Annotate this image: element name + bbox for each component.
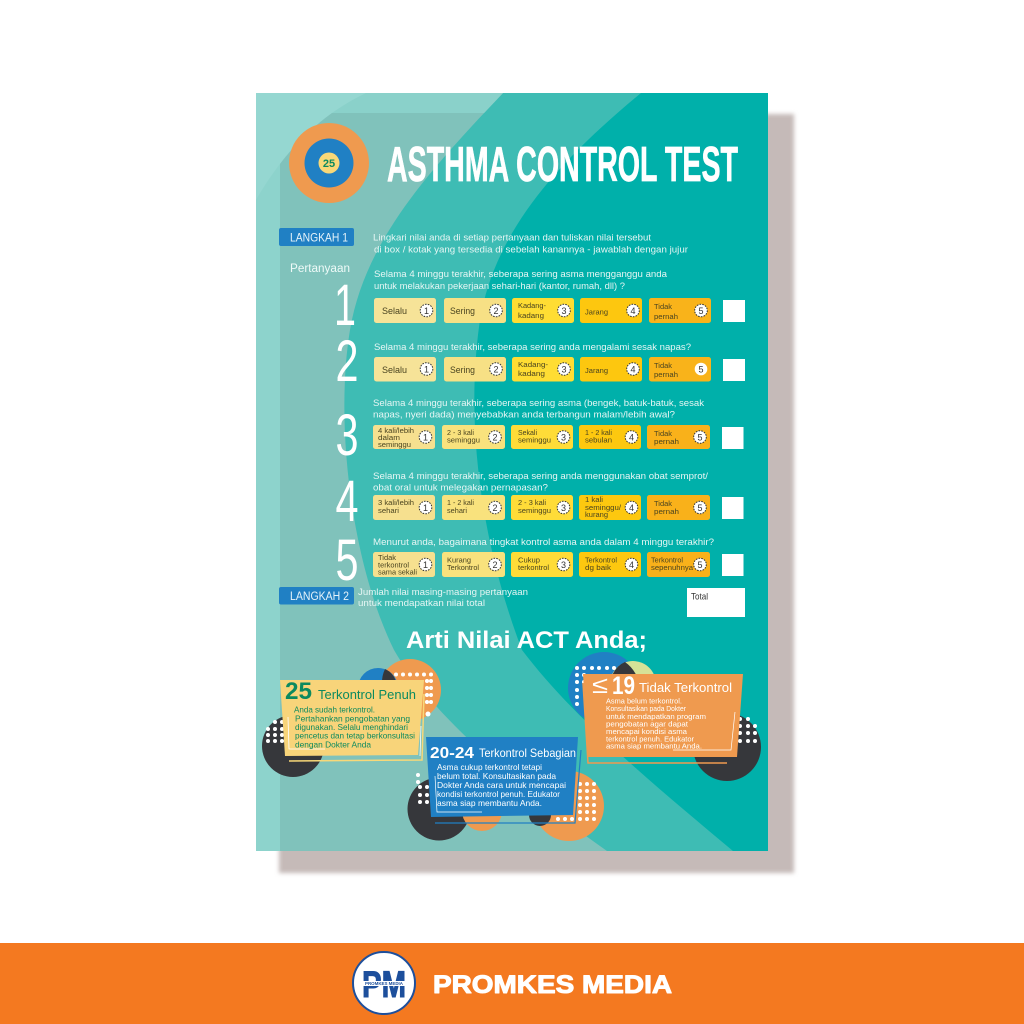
question 5 options: Kurang [447, 558, 471, 564]
card 19: terkontrol penuh. Edukator [606, 734, 694, 744]
question 5 options: Tidak [378, 555, 397, 562]
question 4 options [373, 495, 710, 520]
card 19: Asma belum terkontrol. [606, 696, 682, 706]
question 2 options: 2 [493, 364, 499, 374]
question 1 text [374, 269, 668, 291]
step 1 label: LANGKAH 1 [290, 232, 348, 244]
question 4 options: sehari [378, 508, 399, 515]
question 4 number: 4 [336, 469, 358, 534]
question 3 options: Tidak [654, 431, 673, 438]
card 19: Konsultasikan pada Dokter [606, 704, 686, 713]
question 3 options: seminggu [378, 442, 411, 449]
question 3 options: seminggu [447, 438, 480, 444]
question 5 options: sepenuhnya [651, 565, 693, 572]
question 5 options: Terkontrol [585, 558, 617, 564]
answer box 1 [723, 300, 745, 322]
card 19: mencapai kondisi asma [606, 727, 688, 736]
question 2 options: 5 [698, 364, 704, 374]
question 4 options: 2 - 3 kali [518, 500, 546, 507]
question 2 options: kadang [518, 371, 545, 378]
step 2 instructions [358, 587, 528, 608]
question 5 options: 4 [629, 560, 634, 570]
answer box 4 [722, 497, 744, 519]
question 3 options: 1 [423, 432, 428, 442]
decorative circles 25 [262, 659, 441, 777]
question 1 options: 5 [698, 306, 704, 316]
question 1 options [374, 298, 711, 323]
answer box 3 [722, 427, 744, 449]
card 25: Pertahankan pengobatan yang [295, 714, 410, 724]
question 4 options: 5 [697, 503, 703, 513]
decorative circles 20-24 [408, 771, 604, 841]
question 1 options: Jarang [585, 310, 608, 316]
question 3 options: 5 [697, 432, 703, 442]
question 5 text: Menurut anda, bagaimana tingkat kontrol asma anda dalam 4 minggu terakhir? [373, 537, 714, 547]
question 1 options: Selalu [382, 306, 407, 317]
panel: score 19 or below [568, 652, 761, 781]
question 1 options: 1 [424, 306, 429, 316]
question 1 options: pernah [654, 314, 678, 321]
card 19: 19 [612, 672, 635, 700]
step 1 instructions: di box / kotak yang tersedia di sebelah kanannya - jawablah dengan jujur [374, 244, 688, 254]
question 4 options: 2 [492, 503, 498, 513]
step 1 label [279, 228, 354, 246]
question 3 text: napas, nyeri dada) menyebabkan anda terbangun malam/lebih awal? [373, 410, 675, 420]
card 25 [280, 678, 424, 761]
question 2 options: Kadang- [518, 362, 549, 369]
question 5 options [373, 552, 710, 577]
question 2 options: 1 [424, 364, 429, 374]
card 25: pencetus dan tetap berkonsultasi [295, 730, 415, 740]
question 1 options: kadang [518, 313, 544, 320]
question 4 options: 1 kali [585, 497, 603, 504]
panel: score 25 [262, 659, 441, 777]
question 4 options: sehari [447, 508, 467, 515]
title: ASTHMA CONTROL TEST [387, 138, 738, 192]
question 1 number: 1 [334, 273, 356, 338]
question 5 options: terkontrol [378, 562, 409, 570]
question 2 options [374, 357, 711, 382]
card 20-24: Terkontrol Sebagian [479, 746, 576, 760]
question 4 options: Tidak [654, 501, 673, 508]
logo: PM: PM [362, 964, 406, 1005]
logo: PM: PROMKES MEDIA [365, 981, 404, 986]
question 5 number: 5 [336, 528, 358, 593]
question 3 options: 2 - 3 kali [447, 430, 474, 437]
card 25: Anda sudah terkontrol. [294, 704, 375, 714]
card 19 [583, 672, 743, 763]
question 2 number: 2 [336, 329, 358, 394]
card 25: dengan Dokter Anda [295, 740, 371, 750]
card 25: digunakan. Selalu menghindari [295, 722, 408, 732]
card 20-24: 20-24 [430, 745, 474, 762]
question 5 options: 1 [423, 560, 428, 570]
question 3 options: 4 kali/lebih [378, 428, 414, 435]
card 25: Terkontrol Penuh [318, 687, 416, 702]
question 1 options: Sering [450, 306, 475, 317]
decorative circles 19 [568, 652, 761, 781]
badge: 25 target: 25 [323, 158, 335, 170]
question 3 options: dalam [378, 435, 400, 442]
question 1 options: Tidak [654, 304, 673, 311]
question 2 options: Jarang [585, 368, 608, 375]
question 3 options [373, 425, 710, 449]
card 20-24: asma siap membantu Anda. [437, 798, 542, 808]
question 3 options: seminggu [518, 438, 551, 444]
total box [687, 588, 745, 617]
card 19: asma siap membantu Anda. [606, 742, 702, 750]
question 4 text: Selama 4 minggu terakhir, seberapa sering anda menggunakan obat semprot/ [373, 471, 708, 481]
brand name: PROMKES MEDIA [433, 971, 672, 999]
question 2 options: 3 [561, 364, 567, 374]
poster shadow [279, 114, 794, 873]
question 5 options: sama sekali [378, 570, 417, 576]
question 4 options: 4 [629, 503, 634, 513]
question 4 options: 3 [561, 503, 566, 513]
question 2 text: Selama 4 minggu terakhir, seberapa sering anda mengalami sesak napas? [374, 342, 691, 352]
step 1 instructions: Lingkari nilai anda di setiap pertanyaan dan tuliskan nilai tersebut [373, 232, 651, 242]
badge: 25 target [289, 123, 369, 203]
question 3 text [373, 398, 704, 420]
question 4 text [373, 471, 708, 492]
question 1 options: 3 [561, 306, 567, 316]
question 4 options: seminggu/ [585, 505, 621, 512]
question 3 options: 4 [629, 432, 634, 442]
question 2 options: pernah [654, 372, 678, 379]
question 5 options: dg baik [585, 565, 612, 572]
question 2 options: Selalu [382, 365, 407, 376]
question 2 options: Tidak [654, 363, 673, 370]
step 2 instructions: untuk mendapatkan nilai total [358, 598, 485, 608]
card 20-24 [426, 737, 581, 823]
question 5 options: 3 [561, 560, 566, 570]
card 19: pengobatan agar dapat [606, 720, 689, 728]
question 3 options: 1 - 2 kali [585, 430, 612, 437]
card 20-24: Dokter Anda cara untuk mencapai [437, 780, 566, 790]
logo: PM [353, 952, 415, 1014]
question 5 options: 2 [492, 560, 498, 570]
question 3 options: sebulan [585, 438, 612, 444]
panel: score 20-24 [408, 737, 604, 841]
step 2 label: LANGKAH 2 [290, 591, 349, 603]
question 4 options: 1 [423, 503, 428, 513]
step 2 label [279, 587, 354, 604]
question 4 options: 3 kali/lebih [378, 500, 414, 507]
question 3 number: 3 [336, 403, 358, 468]
question 1 text: Selama 4 minggu terakhir, seberapa sering asma mengganggu anda [374, 269, 668, 279]
question 1 options: 4 [630, 306, 636, 316]
question 4 text: obat oral untuk melegakan pernapasan? [373, 482, 548, 492]
poster background [256, 93, 768, 851]
total box: Total [691, 592, 708, 602]
footer bar [0, 943, 1024, 1024]
question 3 options: Sekali [518, 430, 537, 437]
question 5 options: 5 [697, 560, 703, 570]
card 19: untuk mendapatkan program [606, 712, 706, 721]
question 2 options: Sering [450, 365, 475, 376]
step 1 instructions [373, 232, 688, 254]
question 1 options: 2 [493, 306, 499, 316]
heading: score meaning: Arti Nilai ACT Anda; [406, 627, 647, 654]
question 1 text: untuk melakukan pekerjaan sehari-hari (kantor, rumah, dll) ? [374, 281, 625, 291]
answer box 2 [723, 359, 745, 381]
question 3 options: 3 [561, 432, 566, 442]
question 4 options: kurang [585, 512, 608, 519]
question 4 options: pernah [654, 509, 679, 516]
question 5 options: Terkontrol [651, 558, 683, 564]
question 4 options: seminggu [518, 508, 551, 515]
question 3 text: Selama 4 minggu terakhir, seberapa sering asma (bengek, batuk-batuk, sesak [373, 398, 704, 408]
question 3 options: pernah [654, 439, 679, 446]
question 5 options: Terkontrol [447, 565, 479, 572]
card 25: 25 [285, 678, 312, 705]
answer box 5 [722, 554, 744, 576]
question 1 options: Kadang- [518, 303, 547, 310]
question 3 options: 2 [492, 432, 498, 442]
card 20-24: kondisi terkontrol penuh. Edukator [437, 789, 560, 799]
question 5 options: terkontrol [518, 565, 549, 572]
pertanyaan label: Pertanyaan [290, 263, 350, 275]
card 19: ≤ [592, 672, 608, 699]
step 2 instructions: Jumlah nilai masing-masing pertanyaan [358, 587, 528, 597]
card 20-24: belum total. Konsultasikan pada [437, 771, 556, 781]
card 20-24: Asma cukup terkontrol tetapi [437, 762, 542, 772]
question 5 options: Cukup [518, 558, 540, 564]
question 4 options: 1 - 2 kali [447, 500, 474, 507]
question 2 options: 4 [630, 364, 636, 374]
card 19: Tidak Terkontrol [639, 680, 732, 695]
